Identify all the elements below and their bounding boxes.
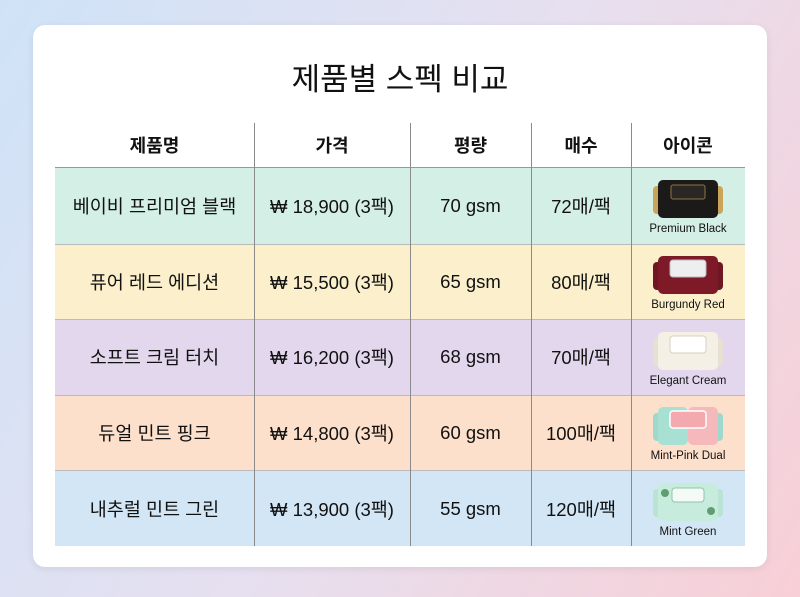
row: mint pink: 100매/팩 [546, 423, 616, 444]
table [55, 123, 745, 546]
header row: 매수 [564, 136, 598, 156]
row: mint green: ₩ 13,900 (3팩) [270, 498, 394, 520]
row: mint pink: ₩ 14,800 (3팩) [270, 423, 394, 444]
row: burgundy: 65 gsm [440, 271, 501, 292]
row: burgundy: 80매/팩 [551, 272, 611, 293]
row: burgundy: 퓨어 레드 에디션 [90, 272, 219, 293]
row: cream: 소프트 크림 터치 [90, 347, 219, 368]
row: mint pink: 듀얼 민트 핑크 [98, 423, 211, 444]
row: cream: 68 gsm [440, 346, 501, 367]
title: 제품별 스펙 비교 [292, 62, 508, 97]
header row: 아이콘 [663, 136, 713, 156]
row: cream: Elegant Cream [650, 375, 726, 387]
row: cream: 70매/팩 [551, 347, 611, 368]
row: premium black [55, 168, 745, 244]
header row: 가격 [315, 136, 349, 156]
header row [55, 123, 745, 168]
row: premium black: 베이비 프리미엄 블랙 [73, 196, 236, 217]
row: premium black: Premium Black [649, 223, 727, 235]
row: cream: ₩ 16,200 (3팩) [270, 347, 394, 368]
row: mint pink: Mint-Pink Dual [651, 450, 725, 462]
row: cream [55, 319, 745, 394]
row: mint green: 120매/팩 [546, 498, 616, 520]
row: mint green [55, 470, 745, 546]
row: burgundy: ₩ 15,500 (3팩) [270, 272, 394, 293]
row: premium black: 70 gsm [440, 195, 501, 216]
row: mint green: Mint Green [660, 526, 716, 538]
row: mint pink: 60 gsm [440, 422, 501, 443]
row: premium black: 72매/팩 [551, 196, 611, 217]
header row: 제품명 [130, 136, 179, 156]
header row: 평량 [454, 136, 487, 156]
row: burgundy [55, 244, 745, 319]
row: mint green: 55 gsm [440, 498, 501, 518]
row: burgundy: Burgundy Red [651, 299, 725, 311]
row: mint pink [55, 394, 745, 470]
row: premium black: ₩ 18,900 (3팩) [270, 196, 394, 217]
row: mint green: 내추럴 민트 그린 [90, 498, 219, 520]
